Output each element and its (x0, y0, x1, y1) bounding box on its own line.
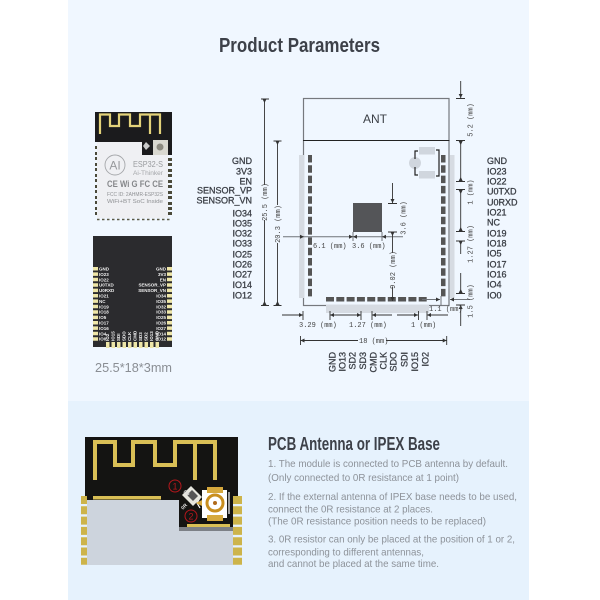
bottom pin labels: CMD (368, 352, 378, 372)
dimension: 25.5 mm (261, 99, 270, 306)
dimension: 1 mm right (456, 140, 476, 205)
note 3 (268, 534, 515, 570)
bottom pin labels: GND (327, 352, 337, 372)
module photo: back with pin labels: SD3 (138, 332, 143, 341)
right pin labels: U0TXD (487, 186, 517, 196)
dimension: 18 mm: 18 (mm) (359, 338, 388, 346)
left pin labels: IO34 (232, 208, 252, 218)
dimension: 5.2 mm (456, 81, 476, 137)
right pin labels: IO16 (487, 270, 507, 280)
bottom pin labels: IO2 (420, 352, 430, 367)
module photo: back with pin labels: SENSOR_VP (138, 283, 166, 288)
module photo: back with pin labels: IO14 (156, 331, 166, 336)
bottom pin labels: SDO (388, 352, 398, 372)
dimension: 18 mm (300, 336, 447, 346)
left pin labels (196, 156, 252, 300)
module photo: back with pin labels: U0RXD (99, 288, 115, 293)
note 3: and cannot be placed at the same time. (268, 558, 439, 570)
dimension: 3.29 mm: 3.29 (mm) (299, 322, 337, 330)
module photo: front: AI (109, 158, 121, 172)
bottom pin labels: CLK (378, 352, 388, 370)
right pin labels: IO19 (487, 228, 507, 238)
right pin labels: IO22 (487, 176, 507, 186)
bottom pads (326, 297, 427, 302)
right pin labels: U0RXD (487, 198, 518, 208)
left pin labels: GND (232, 156, 252, 166)
grey pad shadows (299, 155, 454, 313)
note 3: corresponding to different antennas, (268, 546, 424, 558)
module photo: back with pin labels: IO35 (156, 299, 166, 304)
dimension: 6.1 and 3.6 mm horizontal: 3.6 (mm) (352, 243, 386, 251)
marker 2: 2 (188, 512, 194, 522)
marker 1 (169, 480, 181, 492)
dimension: 1.1 mm: 1.1 (mm) (429, 306, 463, 314)
right pin labels: IO23 (487, 166, 507, 176)
module photo: back with pin labels: IO15 (110, 331, 116, 341)
module photo: back with pin labels: IO22 (99, 277, 109, 282)
left pin labels: IO27 (232, 270, 252, 280)
module photo: back with pin labels: IO34 (156, 294, 166, 298)
right pin labels: IO4 (487, 280, 502, 290)
dimension: 1 mm bottom: 1 (mm) (411, 322, 436, 330)
right pin labels: GND (487, 156, 508, 166)
dimension: 3.29 mm (282, 311, 337, 330)
module photo: back with pin labels: IO33 (156, 310, 166, 315)
module photo: back with pin labels: IO0 (99, 337, 107, 342)
module photo: back with pin labels: IO16 (99, 326, 109, 331)
bottom pin labels: SD2 (348, 352, 358, 370)
module photo: back with pin labels: SDI (116, 333, 121, 341)
module photo: back with pin labels (93, 236, 172, 347)
dimension: 1.27 mm right (456, 190, 476, 294)
left pads (308, 155, 312, 296)
dimension: 20.3 mm: 20.3 (mm) (275, 205, 283, 243)
module photo: back with pin labels: GND (156, 266, 167, 272)
dimension: 9.02 mm vertical: 9.02 (mm) (390, 251, 398, 289)
module photo: back with pin labels: IO21 (99, 294, 109, 298)
dimension: 9.02 mm vertical (390, 232, 398, 301)
module photo: antenna close-up (81, 437, 242, 565)
metal shield (87, 500, 233, 565)
dimension: 3.6 mm vertical: 3.6 (mm) (400, 201, 408, 235)
right pin labels: IO5 (487, 248, 502, 258)
right pin labels: IO21 (487, 208, 507, 218)
PCB antenna trace (95, 442, 215, 480)
module photo: front: ESP32-S (133, 160, 163, 169)
dimension: 6.1 and 3.6 mm horizontal: 6.1 (mm) (313, 243, 347, 251)
IPEX socket outline (409, 147, 439, 178)
right pin labels: IO17 (487, 260, 507, 270)
right pin labels: IO18 (487, 238, 507, 248)
right pin labels: IO0 (487, 290, 502, 300)
module photo: back with pin labels: IO4 (99, 331, 107, 336)
note 3: 3. 0R resistor can only be placed at the position of 1 or 2, (268, 534, 515, 546)
module photo: back with pin labels: SENSOR_VN (138, 288, 166, 293)
bottom pin labels: SD3 (358, 352, 368, 370)
title: Product Parameters (219, 34, 380, 57)
module photo: back with pin labels: GND (154, 330, 160, 341)
dimension: 1.27 mm right: 1.27 (mm) (468, 225, 476, 263)
module photo: back with pin labels: IO5 (99, 315, 107, 320)
module size caption: 25.5*18*3mm (95, 361, 172, 375)
left pin labels: IO32 (232, 228, 252, 238)
module photo: back with pin labels: GND (99, 266, 110, 272)
panel: antenna section background (68, 401, 529, 600)
dimension: 6.1 and 3.6 mm horizontal (283, 232, 403, 251)
IPEX connector (196, 487, 229, 521)
dimension: 1.5 mm (422, 284, 476, 326)
module photo: back with pin labels: SDO (122, 331, 126, 341)
module photo: back with pin labels: IO19 (99, 304, 109, 309)
module photo: back with pin labels: IO17 (99, 320, 109, 326)
module photo: back with pin labels: SD2 (144, 332, 148, 341)
module photo: back with pin labels: IO2 (105, 333, 110, 341)
module photo: back with pin labels: NC (99, 299, 106, 304)
bottom pin labels (327, 352, 430, 372)
module photo: front: FCC ID: 2AHMR-ESP32S (107, 192, 164, 198)
note 1: 1. The module is connected to PCB antenna by default. (268, 458, 508, 470)
module photo: back with pin labels: U0TXD (99, 283, 115, 288)
marker 1: 1 (172, 482, 178, 492)
left pin labels: SENSOR_VP (197, 186, 252, 196)
dimension: 20.3 mm (274, 141, 283, 306)
dimension: 1 mm bottom (397, 311, 448, 330)
0R resistor pads (180, 486, 202, 511)
dimension: 5.2 mm: 5.2 (mm) (468, 103, 476, 137)
module photo: back with pin labels: IO18 (99, 310, 109, 315)
marker 2 (185, 510, 197, 522)
module photo: back with pin labels: IO23 (99, 272, 109, 277)
module photo: back with pin labels: IO25 (156, 315, 166, 320)
module photo: back with pin labels: IO32 (156, 304, 166, 309)
left pin labels: IO25 (232, 250, 252, 260)
module photo: back with pin labels: CMD (132, 330, 138, 341)
dimension: 3.6 mm vertical (388, 183, 408, 236)
bottom pin labels: IO13 (338, 352, 348, 372)
module photo: back with pin labels: IO13 (149, 331, 154, 341)
module photo: back with pin labels: IO26 (156, 320, 166, 326)
dimension drawing (261, 81, 476, 346)
module photo: front: Ai-Thinker (133, 171, 163, 177)
left pin labels: IO12 (232, 290, 252, 300)
panel: product parameters background (68, 0, 529, 401)
note 2: (The 0R resistance position needs to be replaced) (268, 516, 486, 528)
right pads (441, 155, 446, 296)
module photo: back with pin labels: CLK (127, 331, 132, 341)
section heading: PCB Antenna or IPEX Base (268, 434, 440, 454)
dimension: 25.5 mm: 25.5 (mm) (262, 183, 270, 221)
0R resistor pads: 0R (182, 489, 191, 498)
bottom pin labels: SDI (400, 352, 410, 367)
side pads (81, 496, 242, 565)
dimension: 1.27 mm bottom (330, 311, 392, 330)
left pin labels: 3V3 (236, 166, 252, 176)
module photo: back with pin labels: EN (160, 277, 166, 282)
bottom pin labels: IO15 (410, 352, 420, 372)
right pin labels (487, 156, 518, 300)
module photo: back with pin labels: IO12 (156, 337, 166, 342)
chip footprint (353, 203, 382, 232)
module photo: back with pin labels: IO27 (156, 326, 166, 331)
left pin labels: IO35 (232, 218, 252, 228)
left pin labels: IO33 (232, 238, 252, 248)
dimension: 1.27 mm bottom: 1.27 (mm) (349, 322, 387, 330)
black PCB (85, 437, 238, 500)
note 1: (Only connected to 0R resistance at 1 point) (268, 472, 459, 484)
note 2 (268, 491, 517, 528)
left pin labels: EN (239, 176, 252, 186)
0R resistor pads: 0R (180, 502, 189, 511)
note 2: 2. If the external antenna of IPEX base needs to be used, (268, 491, 517, 503)
left pin labels: SENSOR_VN (196, 196, 252, 206)
antenna area label: ANT (363, 112, 388, 126)
note 1 (268, 458, 508, 484)
left pin labels: IO14 (232, 280, 252, 290)
module photo: back with pin labels: 3V3 (158, 272, 166, 277)
module photo: front: WiFi+BT SoC Inside (107, 199, 163, 205)
right pin labels: NC (487, 218, 500, 228)
dimension: 1 mm right: 1 (mm) (468, 179, 476, 205)
left pin labels: IO26 (232, 260, 252, 270)
module photo: front (95, 112, 172, 220)
dimension: 1.5 mm: 1.5 (mm) (468, 284, 476, 318)
module outline (304, 98, 449, 306)
module photo: front: CE Wi G FC CE (107, 179, 163, 189)
note 2: connect the 0R resistance at 2 places. (268, 504, 433, 516)
antenna keep-out line (303, 140, 450, 142)
